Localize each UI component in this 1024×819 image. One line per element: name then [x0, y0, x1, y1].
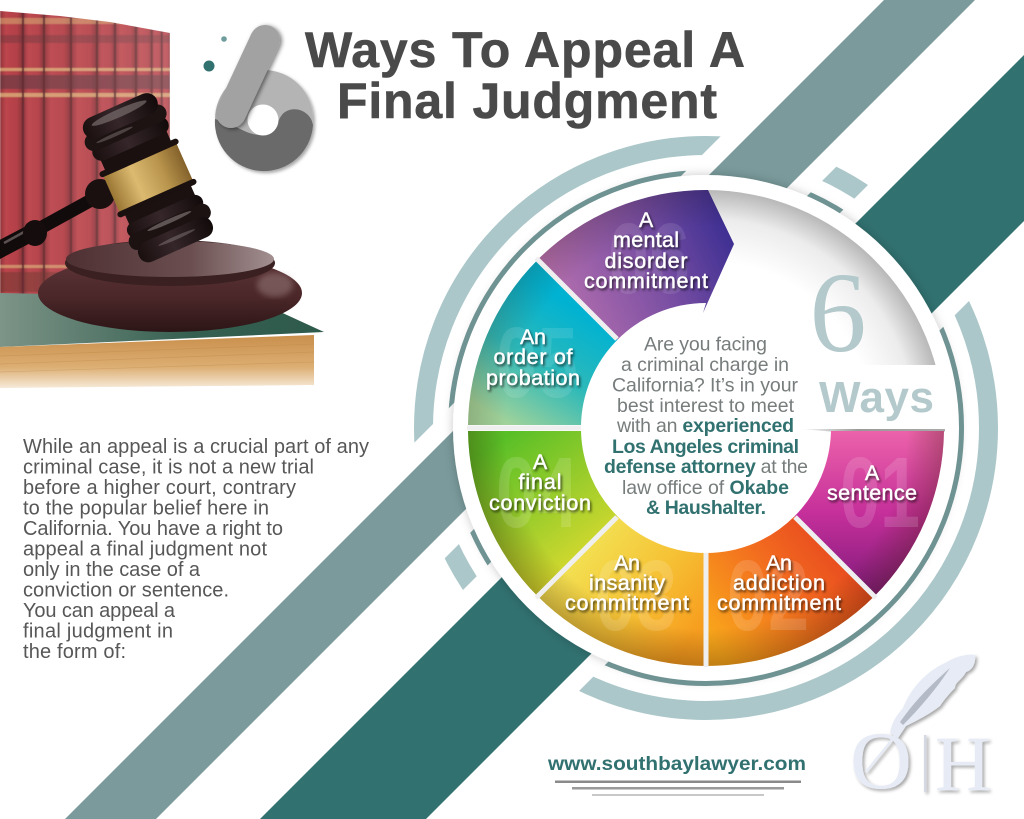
wheel segment 05: an order of probation: probation	[486, 366, 580, 390]
wheel segment 03: an insanity commitment	[538, 516, 706, 666]
wheel segment 04: a final conviction: A	[533, 450, 548, 474]
wheel segment 04: a final conviction: final	[518, 470, 562, 494]
center text block: & Haushalter.	[646, 497, 766, 519]
title	[305, 22, 745, 129]
segment separators	[467, 258, 876, 667]
wheel segment 01: a sentence: 01	[840, 437, 920, 549]
intro paragraph: criminal case, it is not a new trial	[23, 456, 314, 478]
intro paragraph: final judgment in	[23, 620, 173, 642]
big numeral 6 and Ways label	[800, 249, 946, 432]
title: Ways To Appeal A	[305, 22, 745, 78]
wheel segment 06: a mental disorder commitment arrow	[538, 190, 734, 340]
wheel segment 06: a mental disorder commitment arrow: 06	[608, 203, 690, 315]
center text block: best interest to meet	[617, 395, 795, 417]
title: Final Judgment	[337, 73, 717, 129]
wheel segment 02: an addiction commitment: addiction	[733, 571, 825, 595]
center text block: with an experienced	[616, 415, 794, 437]
logo: stylized 6 with dots	[204, 36, 313, 171]
outer ring: upper-left thick arc	[414, 136, 720, 442]
quill	[890, 655, 975, 738]
gavel head	[76, 88, 220, 267]
red law books	[0, 5, 170, 300]
gavel handle	[0, 198, 95, 252]
outer ring: small top-right and bottom-left blocks	[444, 166, 868, 590]
outer ring: lower-right thick arc	[579, 301, 998, 720]
intro paragraph: appeal a final judgment not	[23, 538, 267, 560]
wheel segment 03: an insanity commitment: insanity	[589, 571, 665, 595]
wheel segment 05: an order of probation: An	[520, 325, 546, 349]
wheel segment 06: a mental disorder commitment arrow: A	[639, 208, 654, 232]
intro paragraph: only in the case of a	[23, 559, 201, 581]
wheel segment 04: a final conviction: conviction	[489, 491, 591, 515]
center text block: California? It’s in your	[612, 374, 798, 396]
wheel segment 06: a mental disorder commitment arrow: disorder	[604, 249, 688, 273]
wheel segment 02: an addiction commitment: commitment	[717, 591, 841, 615]
wheel segment 03: an insanity commitment: 03	[595, 540, 677, 652]
6 ring	[215, 70, 313, 171]
firm logo: quill with O|H monogram: H	[935, 720, 991, 807]
intro paragraph: You can appeal a	[23, 600, 176, 622]
wheel segment 01: a sentence: A	[865, 461, 880, 485]
wheel segment 02: an addiction commitment	[706, 516, 874, 666]
wheel segment 03: an insanity commitment: commitment	[565, 591, 689, 615]
6 stem pill	[231, 40, 265, 113]
wheel top-right shaded quadrant	[700, 190, 936, 365]
wheel segment 02: an addiction commitment: 02	[727, 540, 809, 652]
wheel segment 02: an addiction commitment: An	[766, 551, 792, 575]
big numeral 6 and Ways label: 6	[810, 249, 866, 376]
firm logo: quill with O|H monogram	[850, 655, 991, 807]
wheel segment 04: a final conviction	[468, 431, 618, 596]
intro paragraph: While an appeal is a crucial part of any	[23, 436, 369, 458]
intro paragraph: the form of:	[23, 641, 126, 663]
center text block: defense attorney at the	[604, 456, 808, 478]
wheel segment 06: a mental disorder commitment arrow: mental	[613, 228, 679, 252]
diagonal band: dark teal	[260, 55, 1024, 819]
center text block: Los Angeles criminal	[612, 436, 799, 458]
website url with rules: www.southbaylawyer.com	[547, 753, 806, 775]
intro paragraph: to the popular belief here in	[23, 498, 269, 520]
center text block	[604, 334, 808, 519]
big numeral 6 and Ways label: Ways	[819, 373, 934, 422]
center text block: a criminal charge in	[621, 354, 789, 376]
wheel segment 04: a final conviction: 04	[496, 437, 578, 549]
wheel segment 01: a sentence: sentence	[827, 481, 917, 505]
thin ring arcs	[450, 172, 962, 684]
intro paragraph: before a higher court, contrary	[23, 477, 296, 499]
wheel segment 01: a sentence	[794, 431, 944, 596]
wheel segment 06: a mental disorder commitment arrow: commitment	[584, 269, 708, 293]
intro paragraph	[23, 436, 369, 663]
intro paragraph: California. You have a right to	[23, 518, 283, 540]
photo: gavel on law book with red books behind	[0, 5, 324, 388]
wheel segment 05: an order of probation: order of	[494, 345, 573, 369]
center text block: law office of Okabe	[622, 477, 789, 499]
wheel segment 05: an order of probation	[468, 260, 618, 425]
intro paragraph: conviction or sentence.	[23, 580, 229, 602]
wheel segment 05: an order of probation: 05	[496, 307, 578, 419]
law book under sound block	[0, 293, 324, 347]
firm logo: quill with O|H monogram: O	[850, 715, 912, 806]
sound block	[38, 254, 302, 332]
center text block: Are you facing	[644, 334, 767, 356]
wheel white base disc	[453, 175, 959, 681]
wheel segment 03: an insanity commitment: An	[614, 551, 640, 575]
